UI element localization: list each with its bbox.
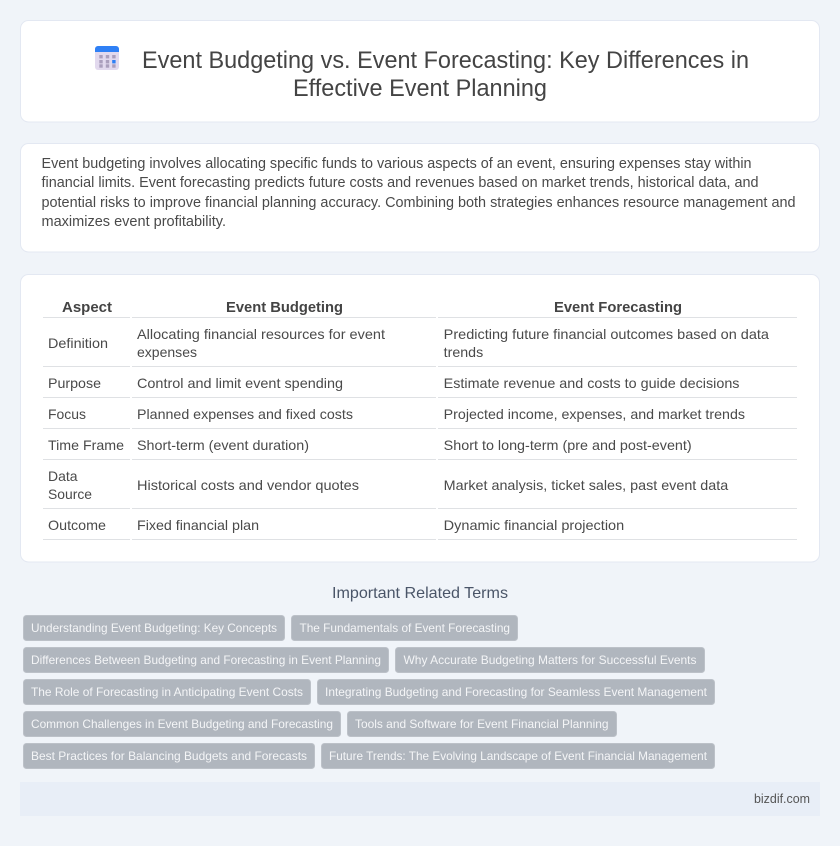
tag: Differences Between Budgeting and Forecasting in Event Planning	[31, 653, 381, 667]
footer bar	[20, 782, 820, 816]
intro text: maximizes event profitability.	[42, 214, 226, 230]
related terms heading: Important Related Terms	[332, 585, 508, 602]
row: focus: Focus	[48, 406, 86, 422]
row: data source: Source	[48, 486, 92, 502]
row: definition: Allocating financial resources for event	[137, 326, 385, 342]
tag	[322, 744, 714, 768]
tag: The Fundamentals of Event Forecasting	[300, 621, 510, 635]
tag: Best Practices for Balancing Budgets and Forecasts	[31, 749, 307, 763]
table rules	[43, 317, 797, 540]
footer source: bizdif.com	[754, 792, 810, 806]
tag	[24, 712, 340, 736]
row: definition: Predicting future financial outcomes based on data	[444, 326, 769, 342]
table header row	[62, 299, 682, 316]
row: time frame	[48, 437, 692, 453]
row: focus: Planned expenses and fixed costs	[137, 406, 353, 422]
tag: Integrating Budgeting and Forecasting for Seamless Event Management	[325, 685, 708, 699]
row: data source: Market analysis, ticket sales, past event data	[444, 477, 728, 493]
tag: Future Trends: The Evolving Landscape of Event Financial Management	[329, 749, 708, 763]
tag: Tools and Software for Event Financial Planning	[355, 717, 608, 731]
row: time frame: Short-term (event duration)	[137, 437, 309, 453]
row: purpose: Control and limit event spending	[137, 375, 343, 391]
intro text: financial limits. Event forecasting predicts future costs and revenues based on market trends, historical data, and	[42, 175, 758, 191]
row: definition: trends	[444, 344, 483, 360]
tag	[318, 680, 714, 704]
row: purpose	[48, 375, 740, 391]
tag	[24, 680, 310, 704]
row: definition	[48, 326, 769, 360]
row: data source: Data	[48, 468, 78, 484]
row: outcome: Outcome	[48, 517, 106, 533]
title: Effective Event Planning	[293, 75, 547, 102]
row: definition: expenses	[137, 344, 197, 360]
intro text: potential risks to improve financial planning accuracy. Combining both strategies enhances resource management and	[42, 195, 796, 211]
row: outcome	[48, 517, 624, 533]
tag	[348, 712, 616, 736]
row: focus	[48, 406, 745, 422]
title: Event Budgeting vs. Event Forecasting: Key Differences in	[142, 47, 749, 74]
related terms tags	[24, 616, 714, 768]
intro text	[42, 156, 796, 230]
header panel	[20, 20, 820, 122]
icon: calendar	[95, 46, 119, 70]
tag	[24, 744, 314, 768]
row: purpose: Estimate revenue and costs to guide decisions	[444, 375, 740, 391]
table header row: Event Budgeting	[226, 299, 343, 316]
tag	[24, 616, 284, 640]
row: purpose: Purpose	[48, 375, 101, 391]
intro panel	[20, 144, 820, 252]
table header row: Aspect	[62, 299, 112, 316]
row: time frame: Short to long-term (pre and post-event)	[444, 437, 692, 453]
tag: Understanding Event Budgeting: Key Concepts	[31, 621, 277, 635]
row: outcome: Fixed financial plan	[137, 517, 259, 533]
comparison table panel	[20, 274, 820, 562]
row: outcome: Dynamic financial projection	[444, 517, 624, 533]
tag: The Role of Forecasting in Anticipating Event Costs	[31, 685, 303, 699]
title	[142, 47, 749, 102]
intro text: Event budgeting involves allocating specific funds to various aspects of an event, ensuring expenses stay within	[42, 156, 752, 172]
row: time frame: Time Frame	[48, 437, 124, 453]
tag: Common Challenges in Event Budgeting and Forecasting	[31, 717, 333, 731]
row: data source	[48, 468, 728, 502]
row: data source: Historical costs and vendor quotes	[137, 477, 359, 493]
tag	[396, 648, 704, 672]
tag	[292, 616, 518, 640]
tag	[24, 648, 388, 672]
tag: Why Accurate Budgeting Matters for Successful Events	[404, 653, 696, 667]
row: definition: Definition	[48, 335, 108, 351]
table header row: Event Forecasting	[554, 299, 682, 316]
row: focus: Projected income, expenses, and market trends	[444, 406, 745, 422]
